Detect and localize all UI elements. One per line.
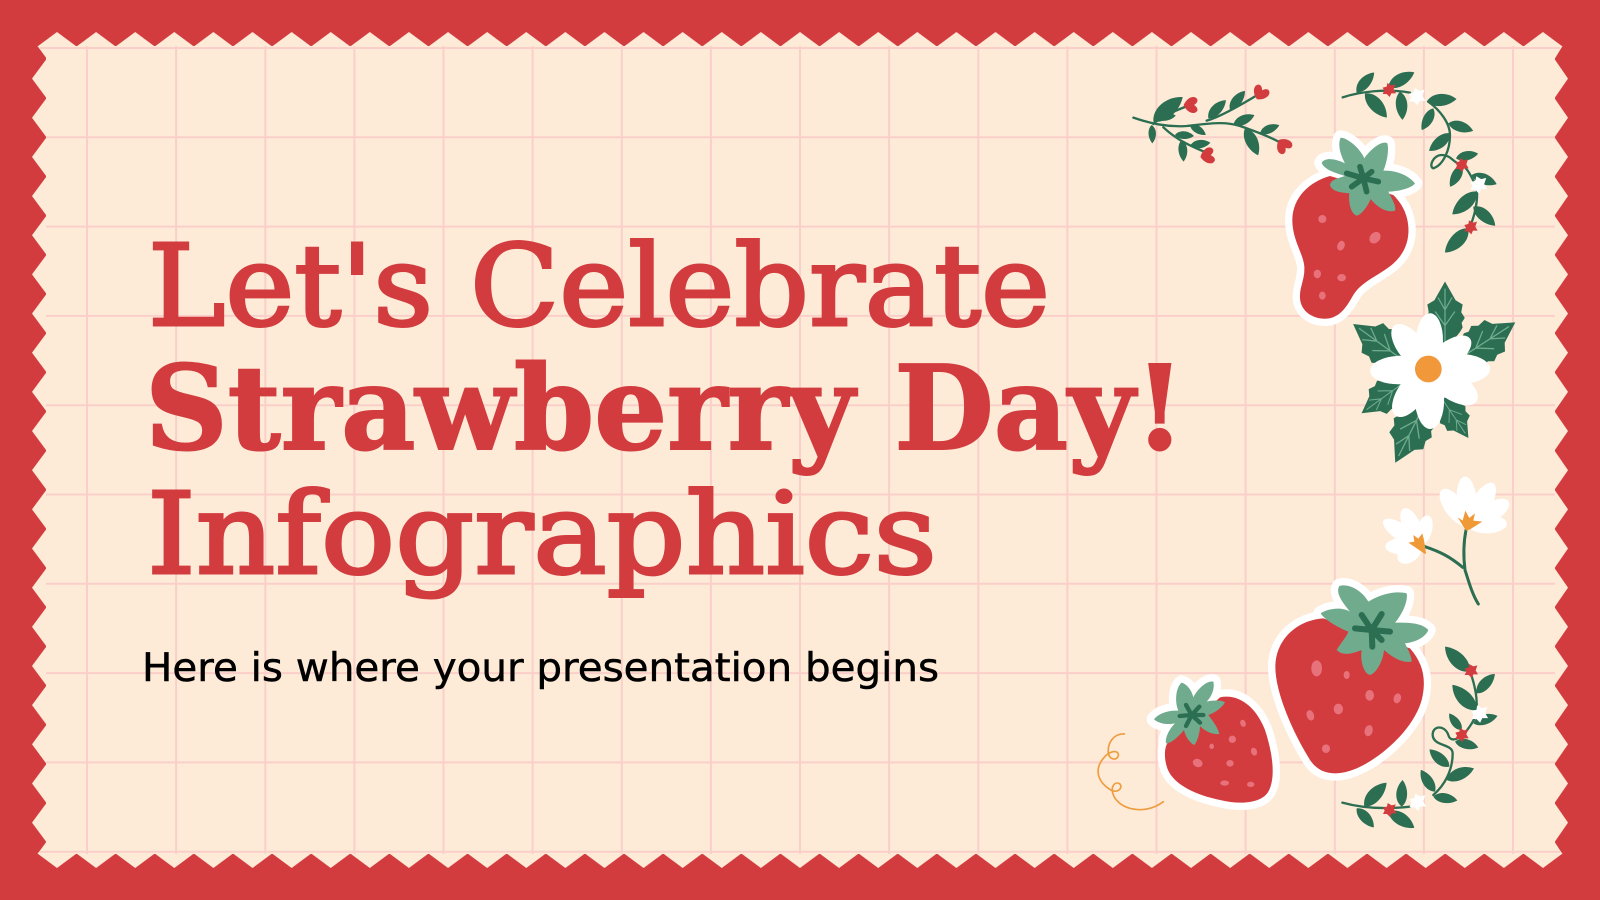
title line 3: Infographics (147, 470, 937, 600)
icon: left floral sprig (1133, 83, 1294, 165)
illustrations: bottom right (1098, 476, 1514, 833)
title line 2: Strawberry Day! (145, 341, 1185, 477)
icon: white flowers on a stem (1379, 476, 1514, 604)
illustrations: top right (1133, 67, 1527, 472)
subtitle: Here is where your presentation begins (142, 646, 939, 691)
title (145, 222, 1185, 600)
title line 1: Let's Celebrate (148, 222, 1050, 352)
icon: daisy with leaves (1341, 281, 1527, 472)
icon: orange squiggle (1098, 734, 1163, 810)
icon: right garland (1343, 67, 1499, 258)
icon: large strawberry (1275, 585, 1428, 773)
icon: small strawberry (1154, 681, 1273, 803)
icon: tilted strawberry (1292, 138, 1415, 319)
icon: bottom garland (1342, 642, 1499, 833)
